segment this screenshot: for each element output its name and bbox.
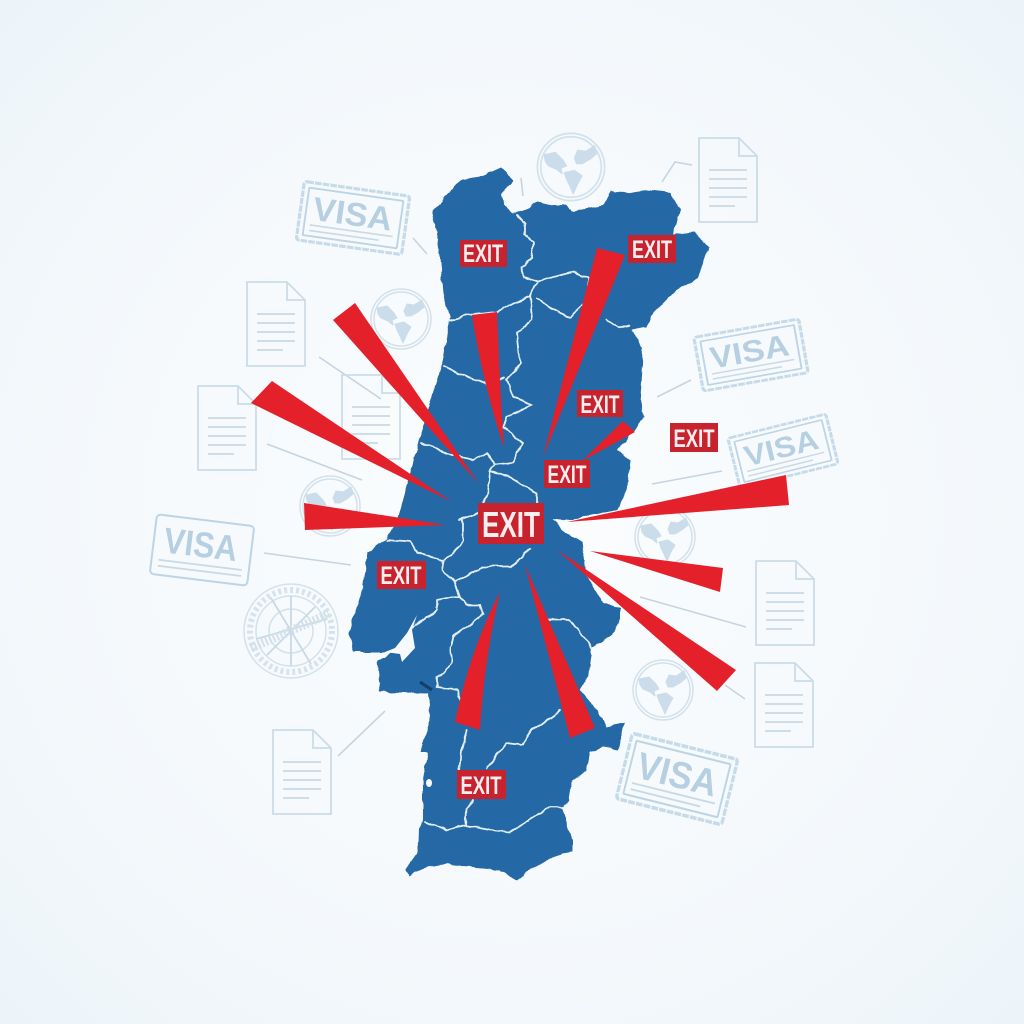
- estuary: [385, 615, 417, 662]
- arrow: north-west lower: [251, 381, 452, 502]
- arrow: south-east: [557, 550, 736, 691]
- arrow: north-west upper: [333, 303, 479, 484]
- icon: document left: [198, 386, 256, 470]
- arrow: west: [304, 503, 446, 530]
- icon: globe right: [635, 507, 695, 567]
- icon: document upper left: [247, 282, 305, 366]
- arrow: south-south-east: [525, 565, 595, 738]
- icon: globe lower right: [633, 660, 693, 720]
- exit label: north-west: EXIT: [463, 240, 503, 268]
- icon: document centre left: [342, 375, 400, 459]
- icon: visa stamp lower right: [616, 733, 738, 825]
- icon: visa stamp right upper: [694, 319, 808, 391]
- lagoon: [426, 779, 432, 787]
- exit label: west: EXIT: [380, 562, 422, 590]
- icon: globe upper left: [371, 289, 431, 349]
- sado estuary: [420, 682, 432, 690]
- exit label: centre: [544, 460, 590, 489]
- arrow: right short: [582, 421, 635, 461]
- exit label: off map: EXIT: [674, 425, 714, 453]
- red arrows: [251, 248, 789, 738]
- arrow: north: [472, 312, 504, 448]
- icon: visa stamp left: [150, 514, 254, 586]
- icon: document right: [756, 561, 814, 645]
- icon: globe top: [537, 133, 605, 201]
- exit label: south: EXIT: [460, 772, 502, 800]
- exit label: north-east: EXIT: [632, 236, 672, 264]
- icon: visa stamp left: VISA: [161, 519, 240, 569]
- icon: document lower right: [755, 663, 813, 747]
- icon: visa stamp top left: [296, 181, 410, 255]
- icon: round stamp: [244, 584, 338, 678]
- exit label: centre north: EXIT: [580, 391, 620, 419]
- icon: globe left: [300, 476, 360, 536]
- connector lines: [264, 162, 746, 756]
- icon: document top right: [699, 138, 757, 222]
- icon: visa stamp right: [728, 414, 838, 488]
- arrow: east: [567, 475, 789, 522]
- exit label: centre: EXIT: [548, 461, 586, 489]
- arrow: south: [455, 592, 500, 730]
- map of Portugal: [349, 168, 710, 880]
- arrow: east lower: [590, 551, 723, 592]
- exit label: main centre: EXIT: [482, 504, 540, 545]
- arrow: north-east tall: [543, 248, 625, 457]
- region borders: [387, 215, 630, 832]
- icon: document lower left: [273, 730, 331, 814]
- exit label: centre north: [577, 390, 623, 419]
